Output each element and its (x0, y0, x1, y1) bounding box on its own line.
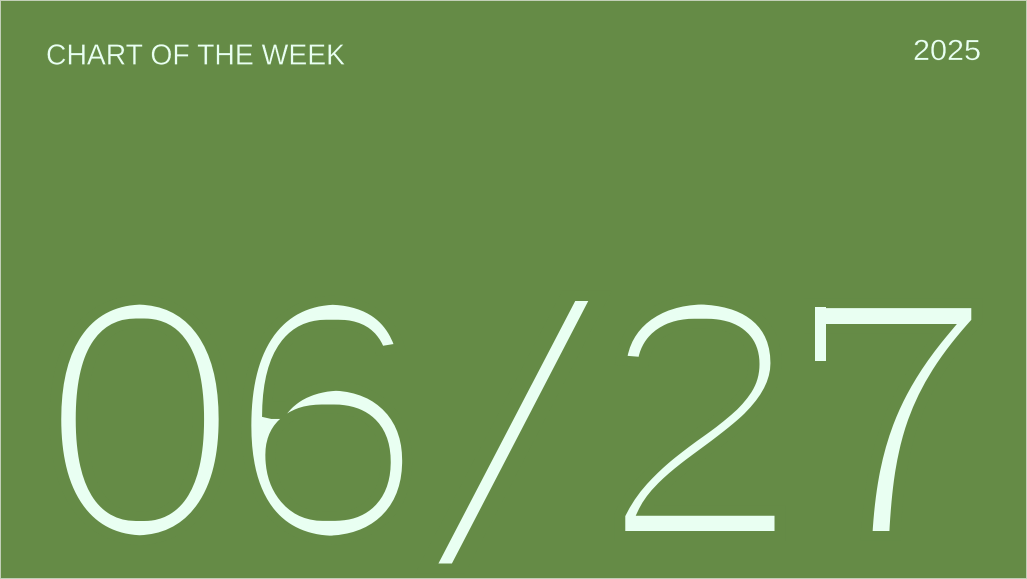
large date: 06/27 (32, 158, 999, 579)
year: 2025 (913, 35, 981, 67)
heading: chart of the week: CHART OF THE WEEK (46, 40, 346, 72)
